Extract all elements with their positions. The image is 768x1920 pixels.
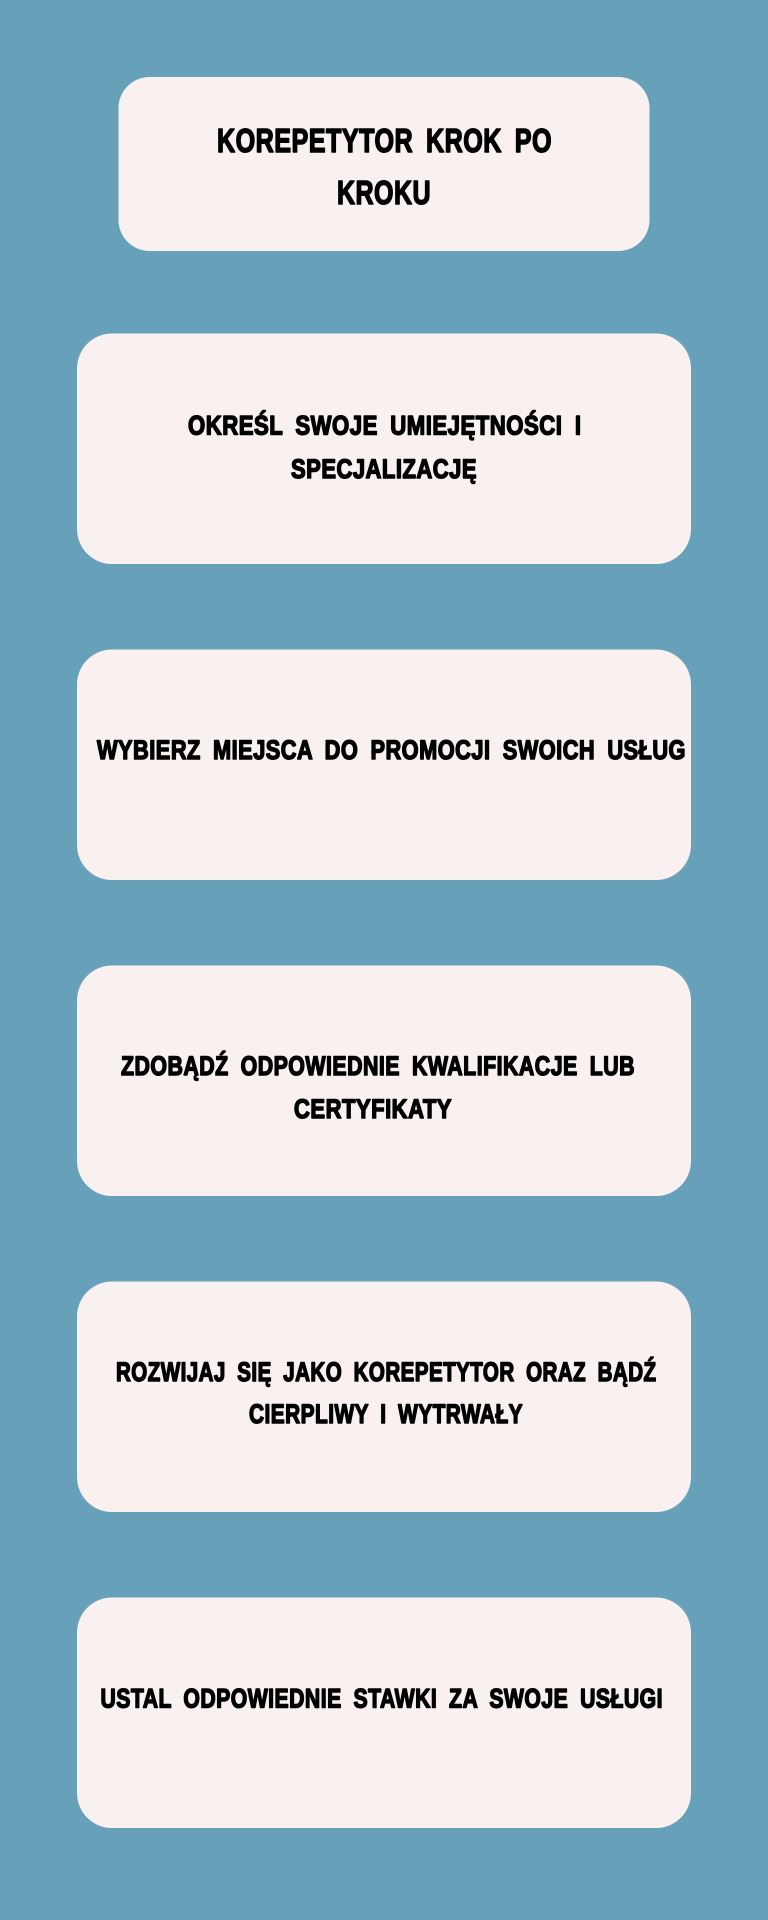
panel: step 3 <box>77 966 691 1196</box>
text: step 1 <box>188 410 582 484</box>
heading: title <box>217 122 552 211</box>
text: step 3: ZDOBĄDŹ ODPOWIEDNIE KWALIFIKACJE LUB <box>121 1050 635 1081</box>
heading: title: KOREPETYTOR KROK PO <box>217 122 552 159</box>
panel: step 4 <box>77 1282 691 1512</box>
text: step 3 <box>121 1050 635 1124</box>
panel: step 1 <box>77 334 691 564</box>
panel: step 2 <box>77 650 691 880</box>
text: step 4 <box>116 1356 656 1429</box>
text: step 1: SPECJALIZACJĘ <box>291 454 477 484</box>
text: step 4: CIERPLIWY I WYTRWAŁY <box>249 1399 523 1429</box>
panel: title <box>118 77 650 251</box>
heading: title: KROKU <box>337 174 431 211</box>
panel: step 5 <box>77 1598 691 1828</box>
text: step 1: OKREŚL SWOJE UMIEJĘTNOŚCI I <box>188 410 582 440</box>
text: step 3: CERTYFIKATY <box>294 1094 452 1124</box>
